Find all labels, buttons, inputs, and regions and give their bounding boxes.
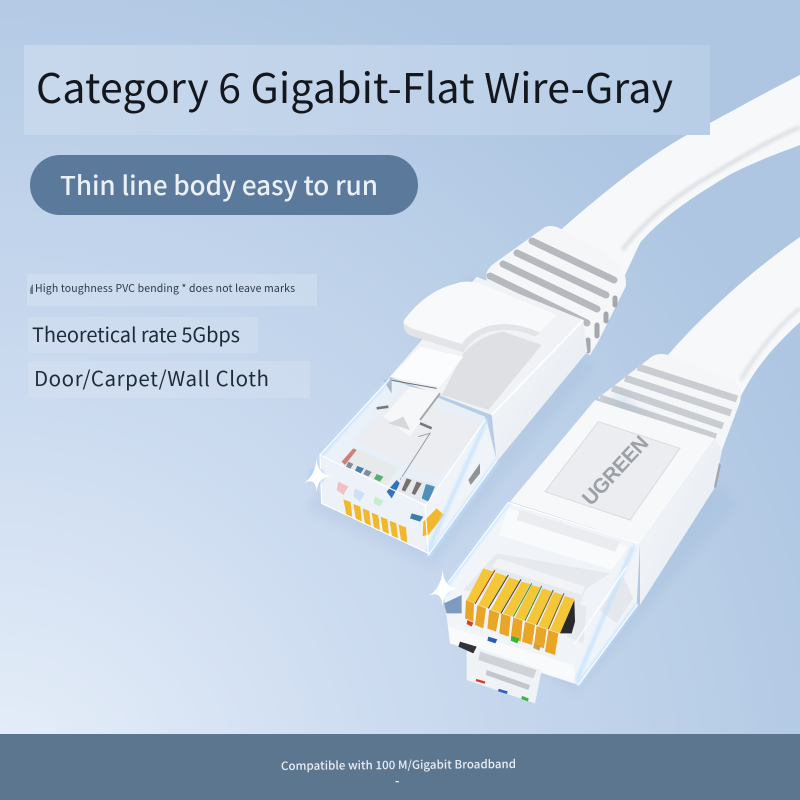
cable: upper flat wire: [550, 75, 800, 275]
boot: lower plug strain relief: [598, 354, 741, 490]
title panel: [24, 45, 710, 135]
compatibility note: Compatible with 100 M/Gigabit Broadband: [281, 756, 516, 774]
boot: upper plug strain relief: [486, 226, 626, 355]
subtitle pill: Thin line body easy to run: [60, 166, 378, 203]
bottom bar: -: [395, 772, 399, 789]
wire tips in pins: [467, 620, 541, 651]
plug body: [510, 400, 722, 605]
sparkle: [428, 570, 458, 607]
transparent connector head: [320, 347, 497, 553]
internal wire colours: [337, 448, 435, 522]
cable: lower flat wire: [660, 237, 800, 396]
latch tab: [403, 282, 557, 352]
sparkle: [303, 458, 332, 492]
connector: lower RJ45 plug with UGREEN logo: [428, 390, 737, 703]
title: Category 6 Gigabit-Flat Wire-Gray: [36, 55, 673, 115]
feature: theoretical rate: Theoretical rate 5Gbps: [32, 319, 240, 348]
gold contact pins: [465, 568, 575, 655]
transparent connector head: [443, 502, 640, 685]
feature: PVC toughness: High toughness PVC bending * does not leave marks: [35, 281, 295, 296]
logo text: UGREEN: [578, 431, 653, 510]
plug body: [390, 277, 587, 462]
pin separators: [475, 570, 564, 629]
feature: PVC toughness: [27, 274, 317, 306]
glowing connector edges: [318, 379, 497, 557]
clear locking tab: [458, 642, 542, 703]
subtitle pill: [30, 155, 418, 215]
feature: door carpet wall cloth: Door/Carpet/Wall Cloth: [34, 362, 269, 392]
logo recess: [545, 422, 680, 520]
glowing connector edges: [443, 503, 638, 685]
latch recess shading: [442, 332, 542, 410]
connector: upper RJ45 plug: [303, 273, 593, 567]
feature: door carpet wall cloth: [28, 361, 310, 398]
bottom bar: [0, 734, 800, 800]
gold contact pins: [343, 499, 444, 543]
